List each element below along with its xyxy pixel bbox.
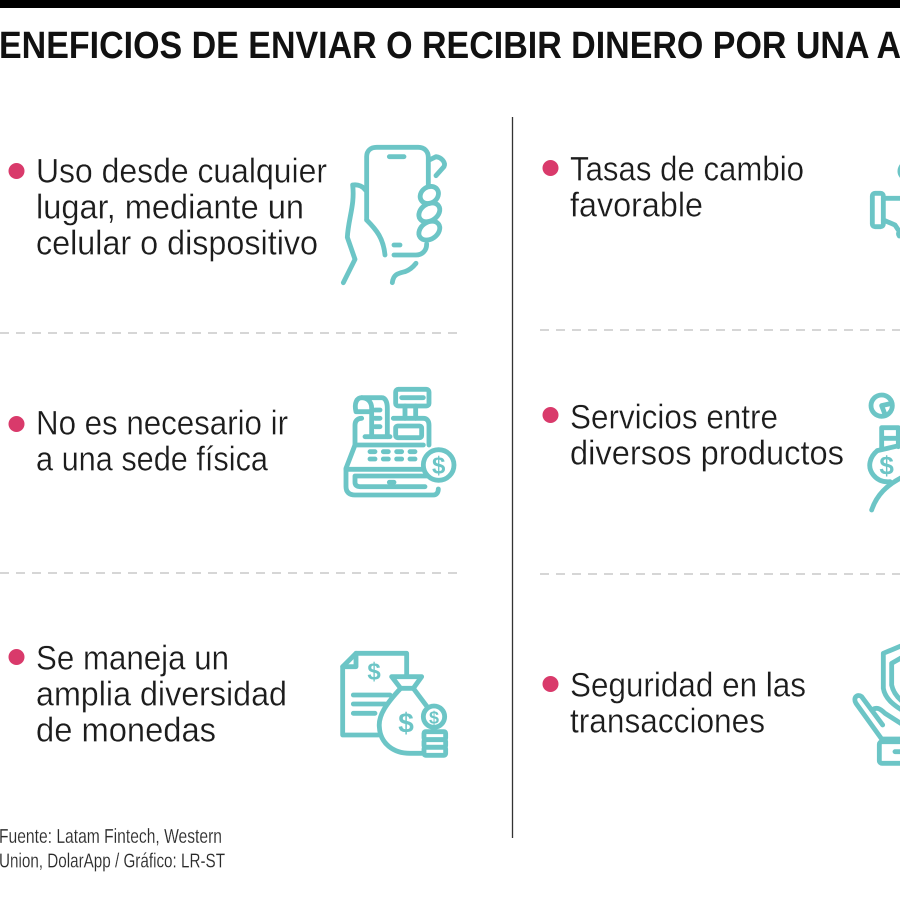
source note: Union, DolarApp / Gráfico: LR-ST	[0, 850, 225, 872]
icon: cash register	[346, 389, 454, 495]
icon: hand holding shield, cropped	[855, 645, 900, 763]
source note	[0, 826, 225, 872]
benefit: currency diversity: de monedas	[36, 712, 216, 750]
benefit: currency diversity: Se maneja un	[36, 640, 229, 678]
benefit: favorable exchange rates	[542, 150, 804, 224]
benefit: currency diversity	[8, 640, 287, 750]
icon: invoice, money bag and coins: $	[367, 658, 381, 685]
central vertical divider	[512, 117, 514, 838]
icon: money bag and chart, cropped: $	[879, 450, 894, 480]
benefit: transaction security	[542, 666, 806, 740]
benefit: use from anywhere: Uso desde cualquier	[36, 152, 327, 190]
benefit: use from anywhere: celular o dispositivo	[36, 224, 318, 262]
benefit: transaction security: transacciones	[570, 702, 765, 740]
icon: hand holding phone	[343, 147, 444, 283]
benefit: transaction security: Seguridad en las	[570, 666, 806, 704]
benefit: favorable exchange rates: Tasas de cambio	[570, 150, 804, 188]
benefit: services across products	[542, 398, 844, 472]
icon: money bag and chart, cropped	[870, 395, 900, 510]
icon: cash register: $	[432, 453, 445, 480]
benefit: no physical branch needed: a una sede física	[36, 440, 268, 478]
benefit: no physical branch needed	[8, 404, 288, 478]
benefit: use from anywhere: lugar, mediante un	[36, 188, 304, 226]
benefit: services across products: Servicios entre	[570, 398, 778, 436]
icon: invoice, money bag and coins: $	[398, 708, 414, 739]
icon: invoice, money bag and coins: $	[429, 707, 439, 727]
icon: invoice, money bag and coins	[343, 653, 446, 755]
icon: hand with cuff, cropped	[872, 166, 900, 236]
top black bar	[0, 0, 900, 8]
benefit: no physical branch needed: No es necesario ir	[36, 404, 288, 442]
benefit: favorable exchange rates: favorable	[570, 186, 703, 224]
benefit: services across products: diversos productos	[570, 434, 844, 472]
source note: Fuente: Latam Fintech, Western	[0, 826, 222, 848]
benefit: currency diversity: amplia diversidad	[36, 676, 287, 714]
benefit: use from anywhere	[8, 152, 327, 262]
